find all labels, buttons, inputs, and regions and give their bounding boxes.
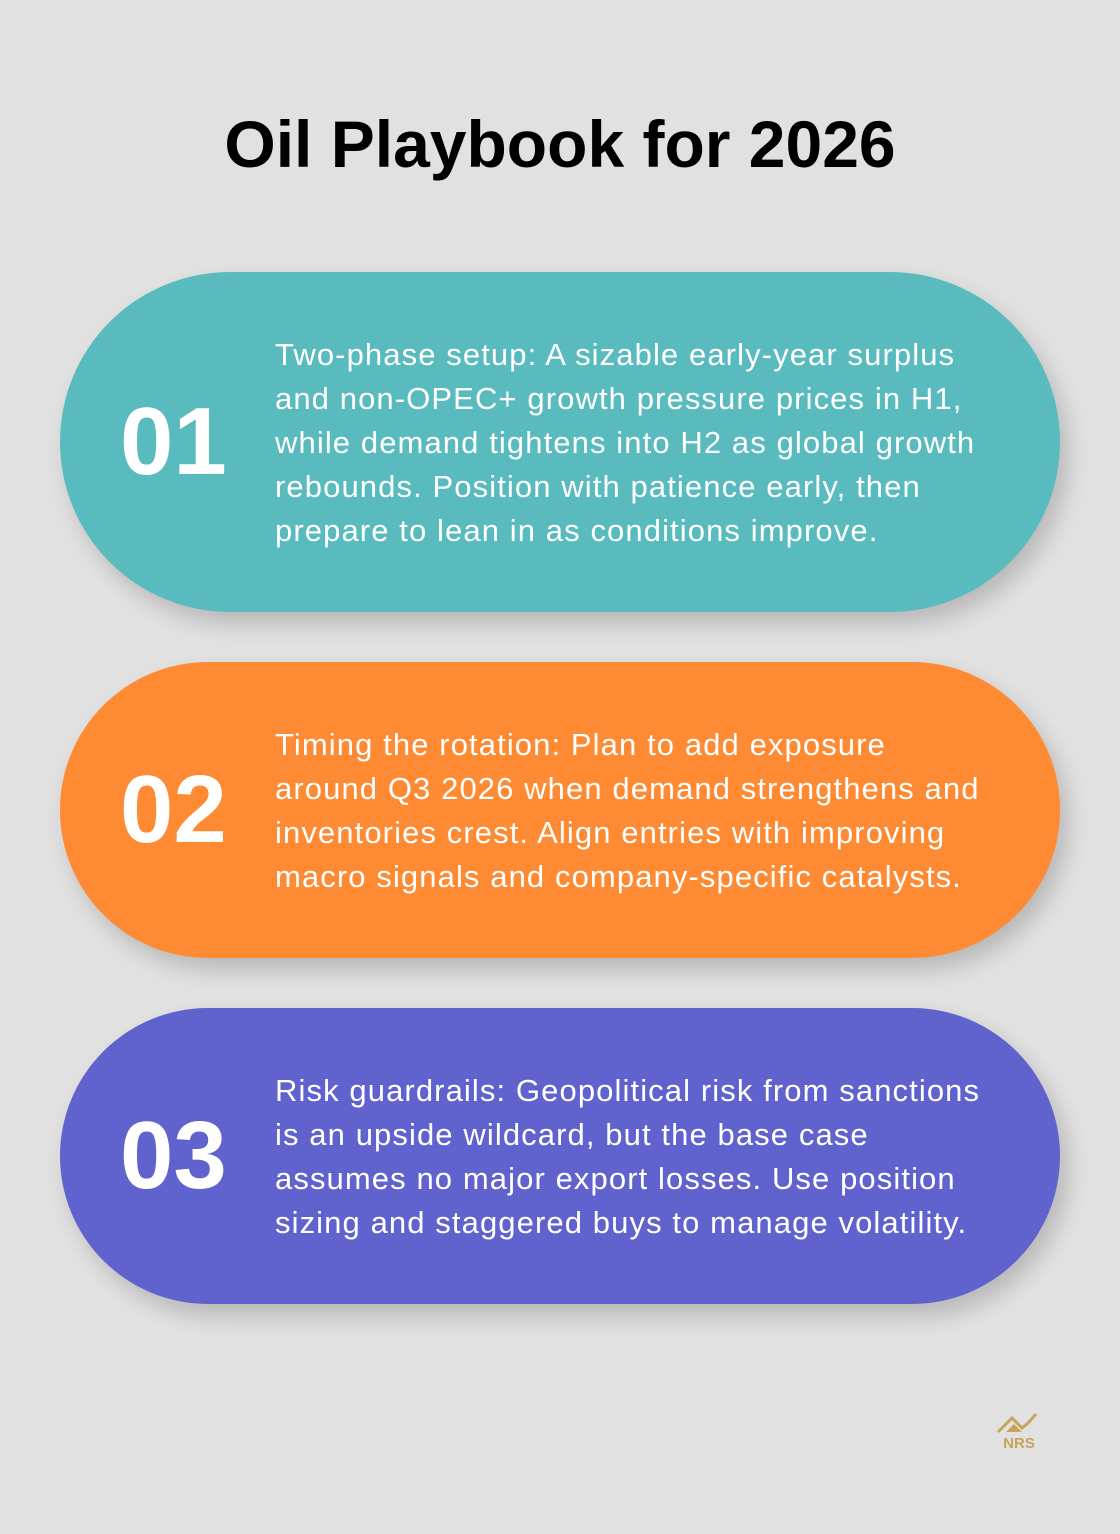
text 02: around Q3 2026 when demand strengthens and	[275, 771, 980, 806]
text 03: sizing and staggered buys to manage volatility.	[275, 1205, 967, 1240]
panel: step 02	[60, 662, 1060, 958]
text 02: Timing the rotation: Plan to add exposure	[275, 727, 886, 762]
text 02: inventories crest. Align entries with improving	[275, 815, 945, 850]
panel: step 03	[60, 1008, 1060, 1304]
number 01: 01	[120, 388, 227, 495]
text 01: prepare to lean in as conditions improve.	[275, 513, 878, 548]
text 01: while demand tightens into H2 as global growth	[275, 425, 975, 460]
text 03	[275, 1073, 980, 1240]
text 02	[275, 727, 980, 894]
number 03: 03	[120, 1102, 227, 1209]
text 03: is an upside wildcard, but the base case	[275, 1117, 869, 1152]
text 01: and non-OPEC+ growth pressure prices in H1,	[275, 381, 962, 416]
logo: NRS: NRS	[1003, 1435, 1035, 1452]
text 01: Two-phase setup: A sizable early-year surplus	[275, 337, 955, 372]
title: Oil Playbook for 2026	[224, 107, 896, 181]
text 03: Risk guardrails: Geopolitical risk from sanctions	[275, 1073, 980, 1108]
text 01	[275, 337, 975, 548]
number 02: 02	[120, 756, 227, 863]
logo: NRS	[997, 1413, 1037, 1452]
text 01: rebounds. Position with patience early, then	[275, 469, 921, 504]
panel: step 01	[60, 272, 1060, 612]
text 02: macro signals and company-specific catalysts.	[275, 859, 962, 894]
text 03: assumes no major export losses. Use position	[275, 1161, 956, 1196]
